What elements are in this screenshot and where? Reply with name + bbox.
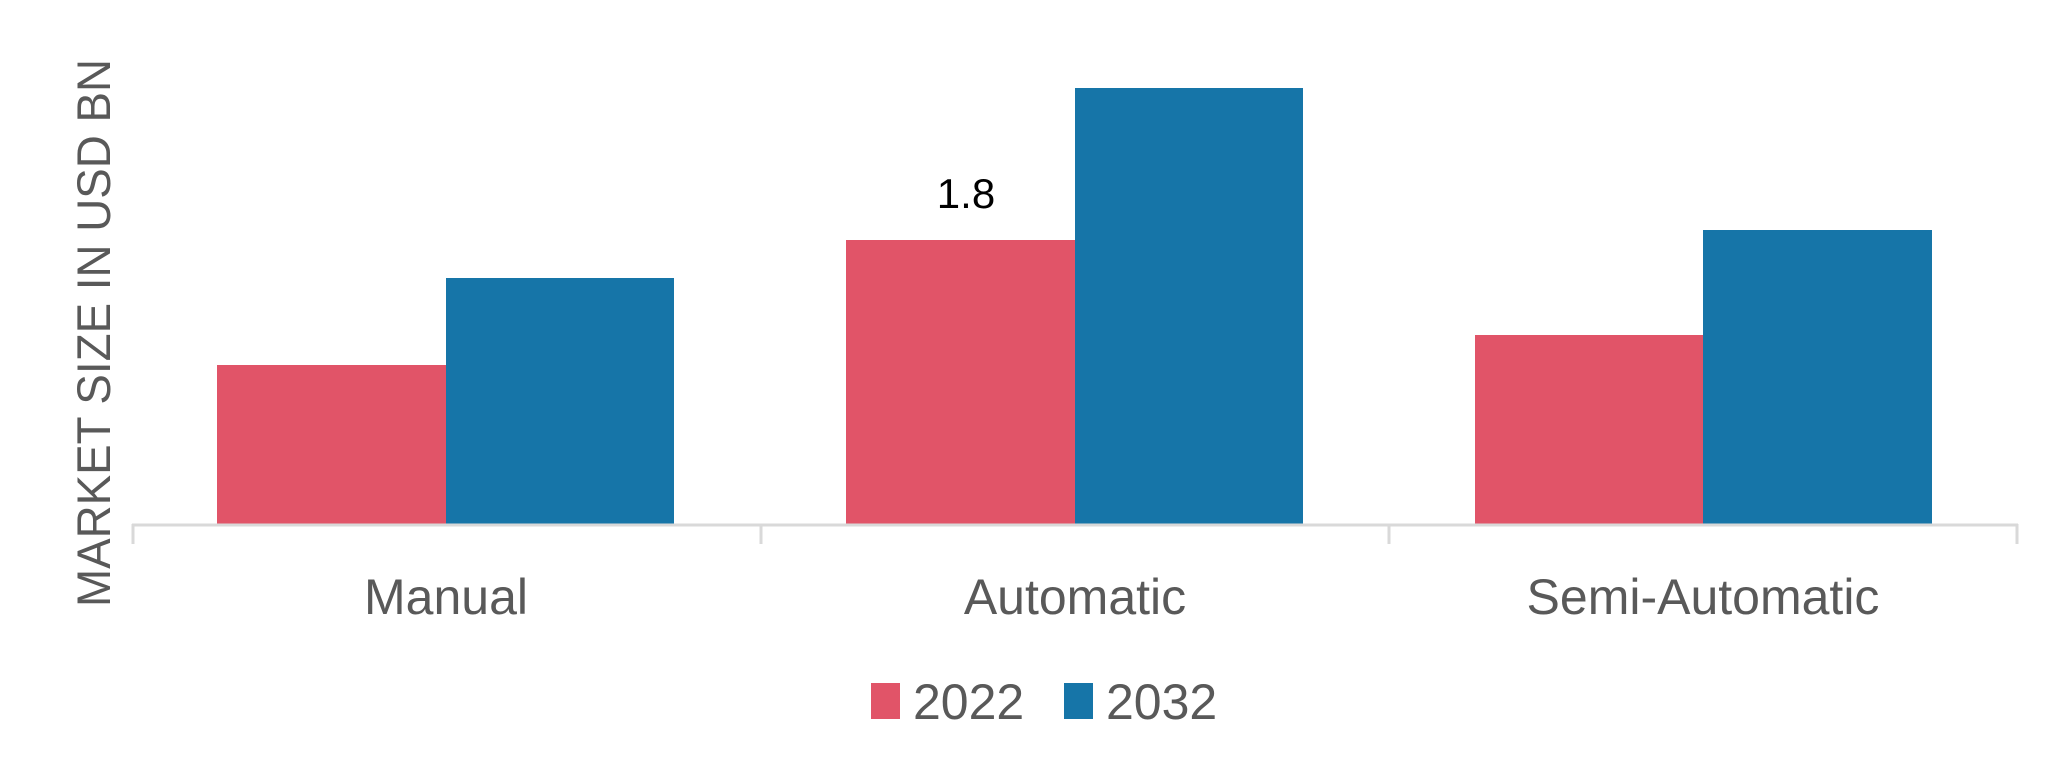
legend: 2032 [1106,674,1217,730]
bar: Automatic 2022 [846,240,1075,524]
bar: Manual 2022 [217,365,446,524]
y-axis title: MARKET SIZE IN USD BN [67,59,120,607]
legend 2032 [1064,683,1093,719]
legend [871,674,1217,730]
legend: 2022 [913,674,1024,730]
category labels [364,569,1879,625]
legend 2022 [871,683,900,719]
category labels: Semi-Automatic [1527,569,1879,625]
bar: Automatic 2032 [1075,88,1303,524]
category labels: Manual [364,569,528,625]
bar: Semi-Automatic 2032 [1703,230,1932,524]
data label: 1.8 [937,170,995,217]
category labels: Automatic [964,569,1186,625]
bar: Semi-Automatic 2022 [1475,335,1703,524]
x axis [132,524,2018,544]
bar: Manual 2032 [446,278,674,524]
bar chart [217,88,1932,524]
